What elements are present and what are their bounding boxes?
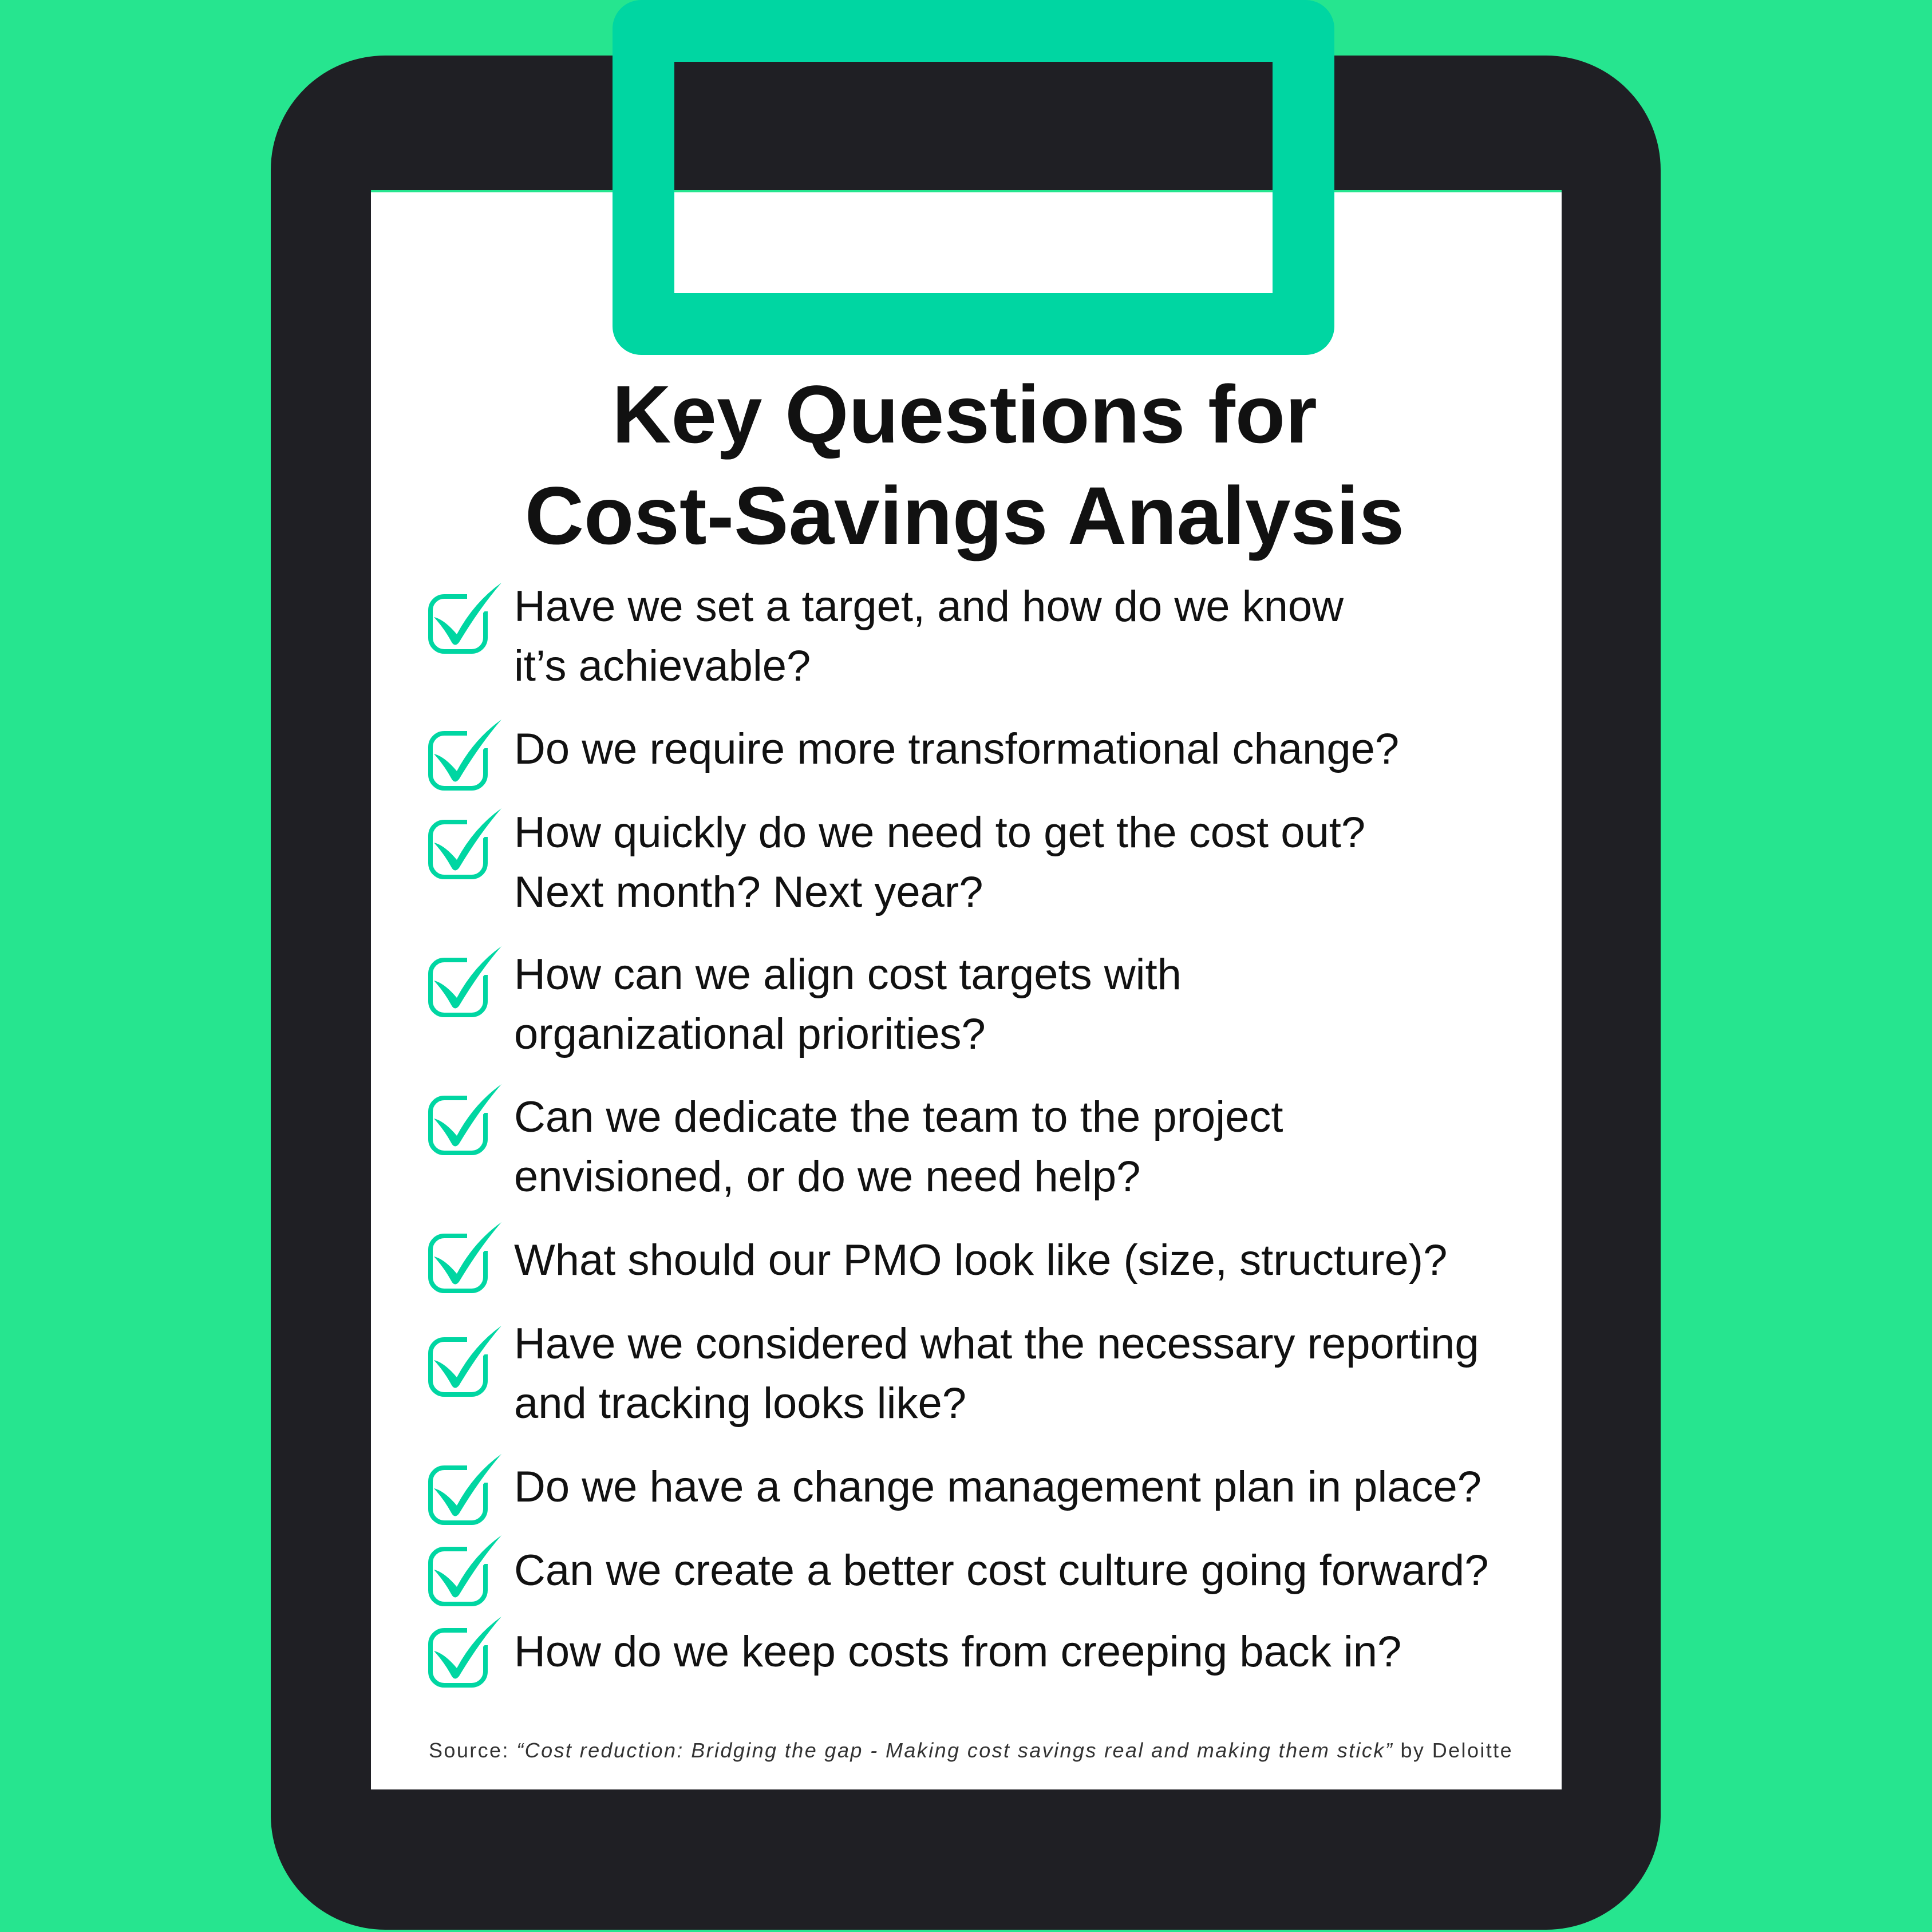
item 2 (428, 720, 1399, 791)
text: Do we have a change management plan in place? (514, 1463, 1481, 1511)
source note: Source: “Cost reduction: Bridging the gap - Making cost savings real and making them stick” by Deloitte (429, 1739, 1513, 1762)
text: it’s achievable? (514, 642, 811, 690)
clip (613, 0, 1334, 355)
item 4 (428, 946, 1182, 1058)
paper sheet (371, 190, 1562, 1789)
text: How quickly do we need to get the cost out? (514, 808, 1365, 857)
text: How do we keep costs from creeping back in? (514, 1627, 1401, 1676)
text: and tracking looks like? (514, 1379, 966, 1428)
text: Next month? Next year? (514, 868, 983, 916)
text: Do we require more transformational change? (514, 725, 1399, 773)
item 7 (428, 1319, 1479, 1428)
title (525, 369, 1404, 562)
title: Key Questions for (612, 369, 1317, 460)
item 9 (428, 1535, 1488, 1606)
text: organizational priorities? (514, 1010, 986, 1058)
item 5 (428, 1084, 1283, 1201)
item 1 (428, 582, 1344, 690)
text: What should our PMO look like (size, structure)? (514, 1236, 1447, 1285)
text: Have we considered what the necessary reporting (514, 1319, 1479, 1368)
clipboard board (271, 56, 1661, 1930)
item 10 (428, 1617, 1401, 1688)
text: Have we set a target, and how do we know (514, 582, 1344, 631)
text: envisioned, or do we need help? (514, 1152, 1140, 1201)
text: How can we align cost targets with (514, 950, 1182, 999)
text: Can we create a better cost culture going forward? (514, 1546, 1488, 1595)
text: Can we dedicate the team to the project (514, 1093, 1283, 1141)
item 3 (428, 808, 1365, 916)
title: Cost-Savings Analysis (525, 471, 1404, 562)
item 6 (428, 1222, 1447, 1293)
item 8 (428, 1454, 1481, 1525)
